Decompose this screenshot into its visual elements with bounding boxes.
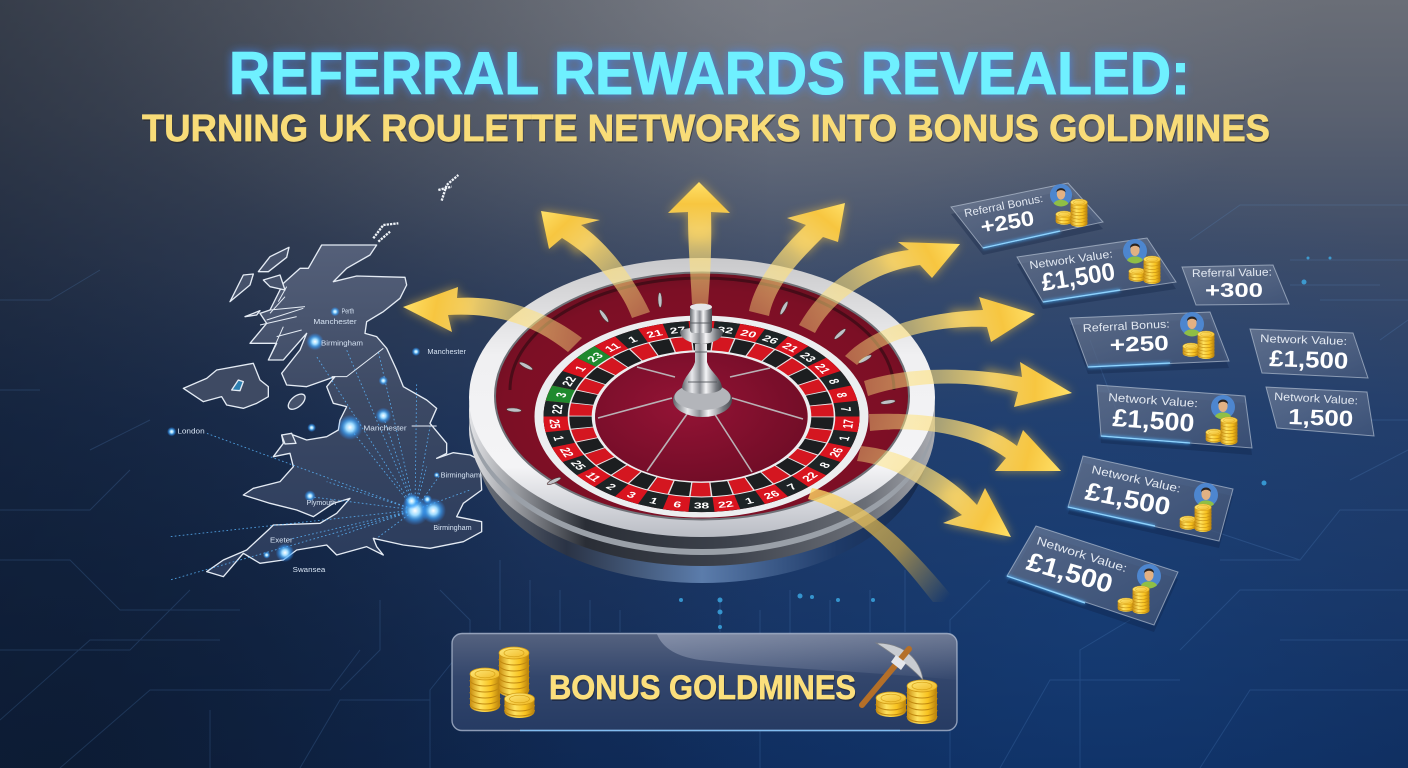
wheel: spokes <box>598 367 803 472</box>
card: referral bonus +250 top <box>951 183 1103 255</box>
arrow: lower right <box>857 446 1011 537</box>
map: city labels: Swansea <box>293 567 325 574</box>
map: city labels: Manchester <box>427 349 467 356</box>
map: glowing city nodes <box>167 307 446 562</box>
map: Scottish west coast detail <box>260 268 437 426</box>
map: city labels: Exeter <box>270 538 293 545</box>
subtitle: TURNING UK ROULETTE NETWORKS INTO BONUS GOLDMINES <box>142 108 1270 150</box>
UK network map <box>167 175 482 580</box>
card: network value 1,500 right upper: Network Value: <box>1260 333 1347 348</box>
card: referral value +300 <box>1182 265 1289 305</box>
wheel: central spindle <box>673 304 732 417</box>
arrow: toward map <box>403 287 582 352</box>
card: network value 1,500 bottom: Network Value: <box>1035 535 1128 575</box>
panel heading: BONUS GOLDMINES <box>550 671 857 709</box>
map: city labels: Plymouth <box>307 500 336 507</box>
card: network value 1,500 upper <box>1017 238 1176 309</box>
map: referral network lines <box>170 350 470 580</box>
wheel: inner cone <box>595 352 807 482</box>
card: network value 1,500 lower: £1,500 <box>1083 477 1173 521</box>
panel heading: BONUS GOLDMINES <box>549 669 856 707</box>
card: referral value +300: Referral Value: <box>1192 267 1272 280</box>
icon: left coin stacks <box>470 647 534 718</box>
subtitle: TURNING UK ROULETTE NETWORKS INTO BONUS GOLDMINES <box>143 110 1271 152</box>
card: referral bonus +250 top: Referral Bonus: <box>963 193 1044 220</box>
arrow: right falling <box>869 414 1061 471</box>
card: network value 1,500 upper: Network Value: <box>1029 248 1114 272</box>
card: referral bonus +250 middle: +250 <box>1109 332 1169 357</box>
map: Great Britain <box>207 245 482 577</box>
card: network value 1,500 bottom <box>1007 526 1178 632</box>
card: network value 1,500 right lower: Network Value: <box>1274 391 1358 407</box>
wheel: felt groove <box>510 278 894 390</box>
card: referral value +300: +300 <box>1205 280 1263 302</box>
card: network value 1,500 centre: £1,500 <box>1112 404 1195 438</box>
map: city labels <box>177 309 480 574</box>
numbers: 22322123111 21 27 20 32 20262123 21 8 8 7 <box>552 326 851 414</box>
map: city labels: Perth <box>342 309 354 316</box>
map: city labels: Birmingham <box>321 340 363 347</box>
title: REFERRAL REWARDS REVEALED: <box>229 40 1190 107</box>
reward arrows fanning out of the wheel <box>403 182 1072 602</box>
card: network value 1,500 lower <box>1068 456 1233 548</box>
map: city labels: Birmingham <box>441 472 480 479</box>
map: city labels: Birmingham <box>433 525 472 532</box>
title <box>142 40 1271 152</box>
arrow: upper right <box>749 203 845 316</box>
reward cards <box>951 183 1374 632</box>
wheel: number ring and pockets <box>534 316 868 518</box>
wheel: number ring and pockets: 25 1 22 25 11 2 3 1 6 38 22 1 26722826117 <box>550 420 854 508</box>
card: network value 1,500 right upper: £1,500 <box>1269 345 1349 374</box>
arrow: upper left <box>541 211 650 318</box>
icon: right coin stacks <box>876 680 937 724</box>
wheel: silver lozenges <box>506 292 896 486</box>
arrow glow <box>403 182 1072 537</box>
roulette wheel <box>469 258 935 583</box>
card: network value 1,500 right lower: 1,500 <box>1288 404 1354 431</box>
card: network value 1,500 right lower <box>1266 387 1374 436</box>
arrow: right rising <box>799 242 960 333</box>
card: referral bonus +250 middle <box>1070 312 1229 374</box>
icon: pickaxe <box>862 643 923 705</box>
wheel: metal base <box>469 258 935 583</box>
map: city labels: Manchester <box>313 319 357 326</box>
map: Northern Ireland <box>183 363 268 408</box>
map: islands <box>230 247 308 444</box>
title: REFERRAL REWARDS REVEALED: <box>229 40 1190 107</box>
card: network value 1,500 centre: Network Value: <box>1108 392 1198 410</box>
arrow: fading tail <box>808 488 957 602</box>
panel: bonus goldmines <box>452 634 957 730</box>
map: Orkney and Shetland clusters <box>373 175 458 242</box>
card: network value 1,500 centre <box>1097 385 1252 455</box>
number track <box>556 328 847 505</box>
arrow: straight up <box>668 182 730 304</box>
card: referral bonus +250 middle: Referral Bonus: <box>1083 318 1170 335</box>
map: city labels: Manchester <box>363 426 407 433</box>
map: city labels: London <box>177 429 205 436</box>
arrow: right <box>845 297 1035 365</box>
card: network value 1,500 lower: Network Value: <box>1090 464 1182 496</box>
wheel: red felt <box>495 272 909 520</box>
card: referral bonus +250 top: +250 <box>979 207 1036 239</box>
pockets <box>581 344 822 489</box>
card: network value 1,500 upper: £1,500 <box>1040 258 1117 297</box>
card: network value 1,500 bottom: £1,500 <box>1023 546 1116 599</box>
arrow: right level <box>864 362 1072 407</box>
card: network value 1,500 right upper <box>1250 329 1368 378</box>
